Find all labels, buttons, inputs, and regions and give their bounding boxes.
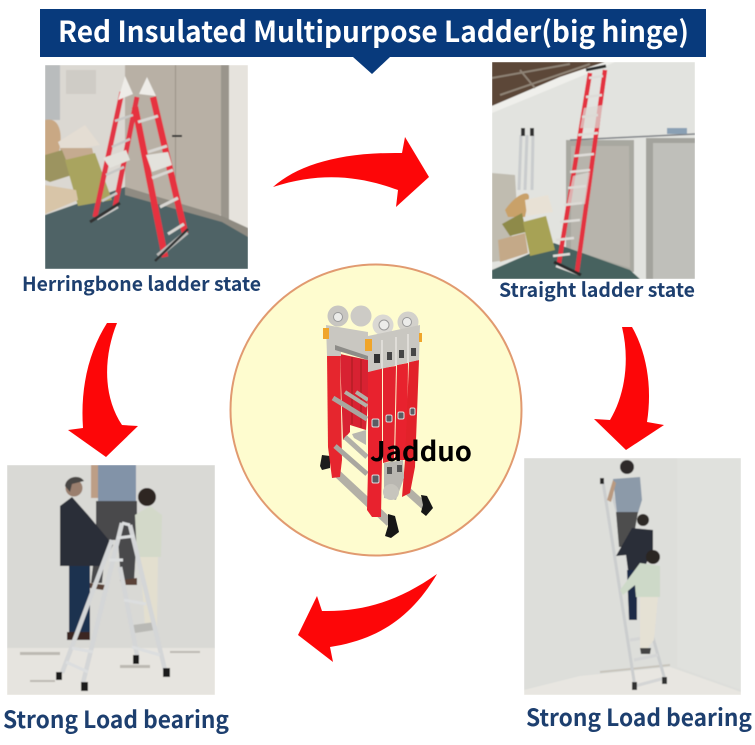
orange caps xyxy=(323,328,329,339)
man in dark jacket xyxy=(637,514,649,526)
arrow: bottom, curving left xyxy=(298,574,437,662)
photo: herringbone ladder state xyxy=(45,65,248,269)
product: folded red ladder xyxy=(320,306,433,538)
hinge slots xyxy=(374,354,380,363)
arrow: left, curving down xyxy=(68,323,138,457)
front feet xyxy=(385,514,399,538)
photo: straight ladder load test xyxy=(524,458,741,695)
caption: herringbone ladder state: Herringbone ladder state xyxy=(22,268,261,297)
A-frame silver ladder xyxy=(62,523,165,683)
older man xyxy=(66,480,82,496)
lower hinge xyxy=(384,460,404,500)
brand: Jadduo: Jadduo xyxy=(370,430,472,469)
rear foot xyxy=(320,455,330,470)
red side rail xyxy=(327,353,342,478)
caption: strong load bearing, left: Strong Load bearing xyxy=(3,701,229,735)
rear ladder legs xyxy=(90,92,137,222)
center product circle xyxy=(230,264,522,556)
arrow: top, curving right xyxy=(273,137,429,207)
silver hinge heads xyxy=(326,325,368,358)
foot rails xyxy=(334,468,392,526)
title banner xyxy=(40,9,706,74)
title text: Red Insulated Multipurpose Ladder(big hinge) xyxy=(58,9,689,51)
straight ladder xyxy=(559,70,605,272)
four red front rails xyxy=(367,368,382,517)
tall man xyxy=(98,465,136,502)
caption: straight ladder state: Straight ladder state xyxy=(499,274,695,303)
photo: A-frame load test xyxy=(7,465,215,695)
inner shaded red xyxy=(340,354,368,440)
caption: strong load bearing, right: Strong Load bearing xyxy=(526,699,752,733)
woman in pale jacket xyxy=(646,550,660,564)
photo: straight ladder state xyxy=(492,62,695,279)
straight silver ladder xyxy=(603,482,665,687)
slot holes xyxy=(372,419,379,427)
arrow: right, curving down xyxy=(594,327,664,450)
woman xyxy=(138,488,156,506)
front ladder legs xyxy=(135,97,185,257)
stored ladder xyxy=(519,135,533,190)
man in grey shirt xyxy=(620,460,634,474)
rungs xyxy=(333,398,367,419)
